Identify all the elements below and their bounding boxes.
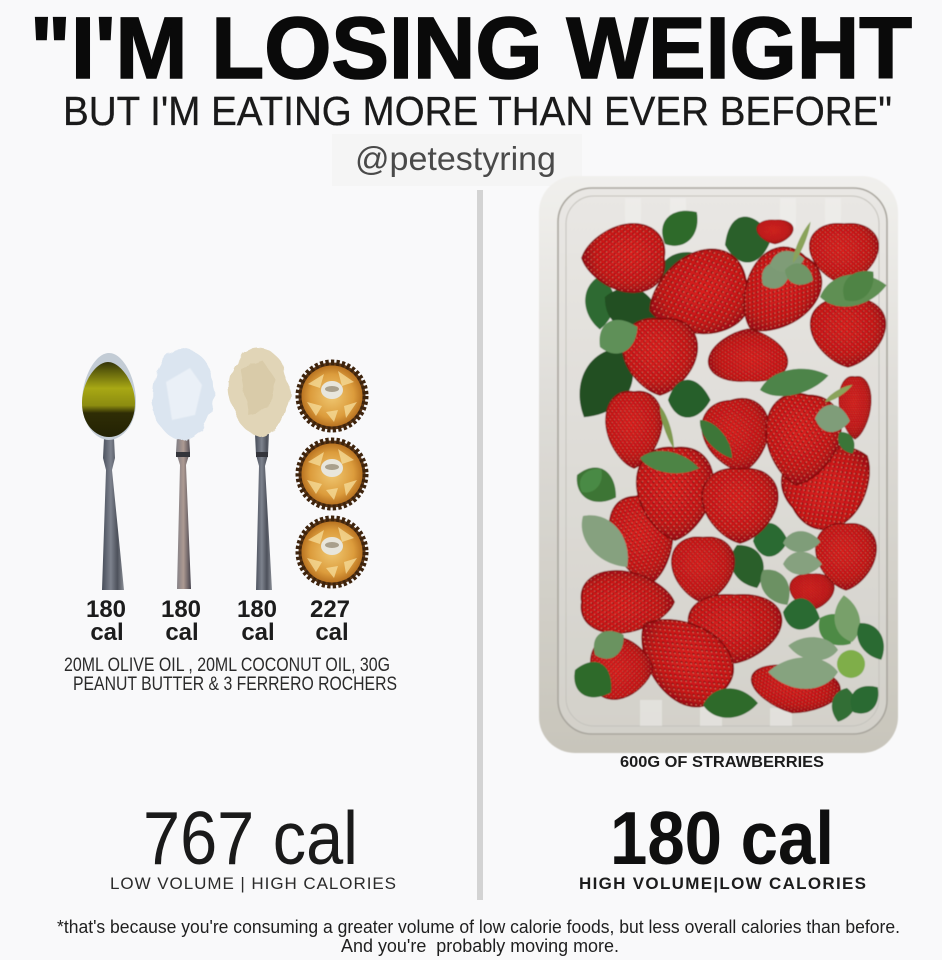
back leaves xyxy=(565,200,788,594)
author handle: @petestyring xyxy=(355,140,556,177)
center divider xyxy=(477,190,483,900)
calorie labels xyxy=(86,596,350,646)
footnote xyxy=(57,917,900,956)
calorie labels: 180 xyxy=(237,596,277,623)
icon: olive oil spoon xyxy=(82,353,136,590)
front leaves xyxy=(566,220,892,725)
calorie labels: cal xyxy=(315,619,349,646)
ingredients caption: PEANUT BUTTER & 3 FERRERO ROCHERS xyxy=(73,674,397,695)
headline: "I'M LOSING WEIGHT xyxy=(30,0,912,97)
panel: strawberries xyxy=(539,176,898,893)
calorie labels: cal xyxy=(90,619,124,646)
calorie labels: cal xyxy=(241,619,275,646)
title xyxy=(30,0,912,134)
strawberry tray photo xyxy=(539,176,898,753)
total calories left: 767 cal xyxy=(143,796,358,880)
icon: peanut butter spoon xyxy=(229,349,289,590)
strawberries xyxy=(582,220,891,720)
total calories right: 180 cal xyxy=(610,796,834,880)
calorie labels: 180 xyxy=(161,596,201,623)
ingredients caption: 20ML OLIVE OIL , 20ML COCONUT OIL, 30G xyxy=(64,655,390,676)
footnote: And you're probably moving more. xyxy=(341,936,619,956)
footnote: *that's because you're consuming a greater volume of low calorie foods, but less overall calories than before. xyxy=(57,917,900,937)
icon: ferrero rocher 1 xyxy=(298,362,366,430)
subheadline: BUT I'M EATING MORE THAN EVER BEFORE" xyxy=(63,88,892,134)
strawberries caption: 600G OF STRAWBERRIES xyxy=(620,754,824,771)
panel: high calorie foods xyxy=(64,349,397,893)
calorie labels: 227 xyxy=(310,596,350,623)
calorie labels: 180 xyxy=(86,596,126,623)
author handle xyxy=(332,134,582,186)
ingredients caption xyxy=(64,655,397,695)
low volume label: LOW VOLUME | HIGH CALORIES xyxy=(110,874,396,893)
calorie labels: cal xyxy=(165,619,199,646)
icon: ferrero rocher 3 xyxy=(298,518,366,586)
high volume label: HIGH VOLUME|LOW CALORIES xyxy=(579,874,866,893)
icon: coconut oil spoon xyxy=(153,349,213,589)
icon: ferrero rocher 2 xyxy=(298,440,366,508)
